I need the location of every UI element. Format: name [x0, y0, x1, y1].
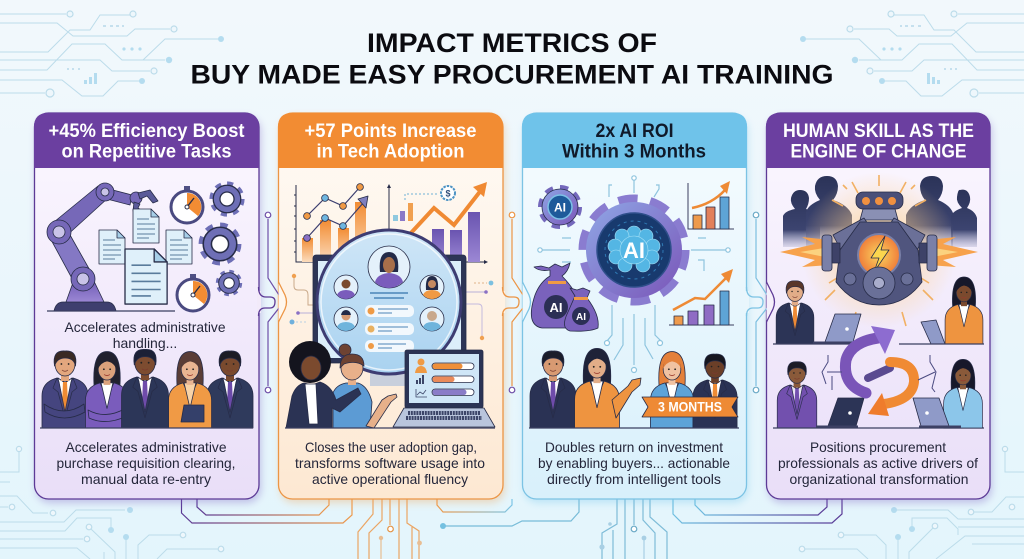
icon: money bags: AI — [550, 300, 562, 315]
title: IMPACT METRICS OF — [367, 28, 657, 58]
two people — [285, 341, 495, 428]
professional: top left with laptop — [773, 281, 861, 344]
description: directly from intelligent tools — [547, 471, 721, 487]
chart: right rising arrow and bars — [380, 182, 488, 264]
heading: +45% Efficiency Boost — [48, 120, 245, 142]
laptop with progress bars — [393, 350, 495, 427]
description: Accelerates administrative — [66, 439, 227, 455]
avatars — [334, 246, 444, 331]
icon: small AI gear: AI — [554, 200, 566, 214]
icon: documents — [99, 209, 192, 304]
caption: handling... — [113, 335, 177, 351]
description — [295, 439, 485, 487]
heading: +57 Points Increase — [304, 120, 477, 142]
title: BUY MADE EASY PROCUREMENT AI TRAINING — [190, 60, 834, 90]
icon: central AI brain gear: AI — [623, 238, 645, 263]
description: organizational transformation — [790, 471, 968, 487]
heading: HUMAN SKILL AS THE — [783, 120, 974, 142]
profile cards — [365, 305, 414, 352]
arrows: change cycle — [845, 326, 914, 416]
professional: bottom left with laptop — [773, 362, 984, 428]
title — [190, 28, 834, 90]
heading — [34, 113, 259, 168]
heading: 2x AI ROI — [596, 120, 674, 142]
circuit pattern: bottom left — [0, 446, 224, 559]
heading: Within 3 Months — [562, 140, 706, 162]
panel 3: AI ROI — [522, 113, 748, 503]
description — [778, 439, 978, 487]
chart: lower right — [669, 269, 734, 325]
description — [538, 439, 730, 487]
icon: money bags: AI — [576, 312, 586, 323]
heading — [522, 113, 747, 168]
icon: stopwatches — [171, 186, 209, 311]
ribbon: 3 months — [642, 397, 738, 417]
team of five people — [40, 349, 253, 428]
icon: small AI gear — [541, 188, 579, 226]
professional: bottom right with laptop — [913, 359, 982, 428]
caption — [64, 319, 226, 351]
engine with sparks — [780, 172, 978, 328]
gear radiating traces — [538, 176, 730, 372]
description: active operational fluency — [312, 471, 468, 487]
chart: top right — [688, 181, 734, 229]
circuit pattern: top right — [800, 11, 1024, 97]
icon: central AI brain gear — [584, 200, 684, 300]
description: transforms software usage into — [295, 455, 485, 471]
description: manual data re-entry — [81, 471, 211, 487]
description: Closes the user adoption gap, — [305, 439, 477, 455]
description: purchase requisition clearing, — [56, 455, 236, 471]
caption: Accelerates administrative — [64, 319, 226, 335]
description: Doubles return on investment — [545, 439, 723, 455]
arrow connector: panel 1 to 2 — [257, 212, 286, 393]
silhouettes — [783, 176, 977, 247]
circuit pattern: bottom right — [799, 446, 1024, 559]
professional: top right with tablet — [899, 277, 984, 344]
icon: money bags — [531, 263, 598, 331]
bottom connectors between panels — [182, 499, 842, 559]
icon: robot arm — [47, 183, 175, 311]
description — [56, 439, 236, 487]
monitor with magnifier of user profiles — [313, 230, 466, 386]
heading: in Tech Adoption — [316, 140, 464, 162]
traces near arrows — [822, 355, 936, 392]
arrow connector: panel 3 to 4 — [745, 212, 774, 393]
heading — [278, 113, 503, 168]
group of four people — [529, 348, 739, 428]
description: professionals as active drivers of — [778, 455, 978, 471]
heading — [766, 113, 990, 168]
icon: gears — [202, 184, 242, 294]
heading: on Repetitive Tasks — [62, 140, 232, 162]
panel 1: efficiency boost — [34, 113, 261, 503]
panel 2: tech adoption — [278, 113, 505, 503]
chart: right rising arrow and bars: $ — [445, 188, 451, 198]
icon: side circuit traces — [290, 274, 493, 340]
description: Positions procurement — [810, 439, 946, 455]
circuit pattern: top left — [0, 11, 224, 97]
description: by enabling buyers... actionable — [538, 455, 730, 471]
panel 4: human skill — [766, 113, 992, 503]
heading: ENGINE OF CHANGE — [790, 140, 966, 162]
arrow connector: panel 2 to 3 — [501, 212, 530, 393]
ribbon: 3 months: 3 MONTHS — [658, 400, 722, 414]
chart: left line and bars — [294, 184, 400, 262]
